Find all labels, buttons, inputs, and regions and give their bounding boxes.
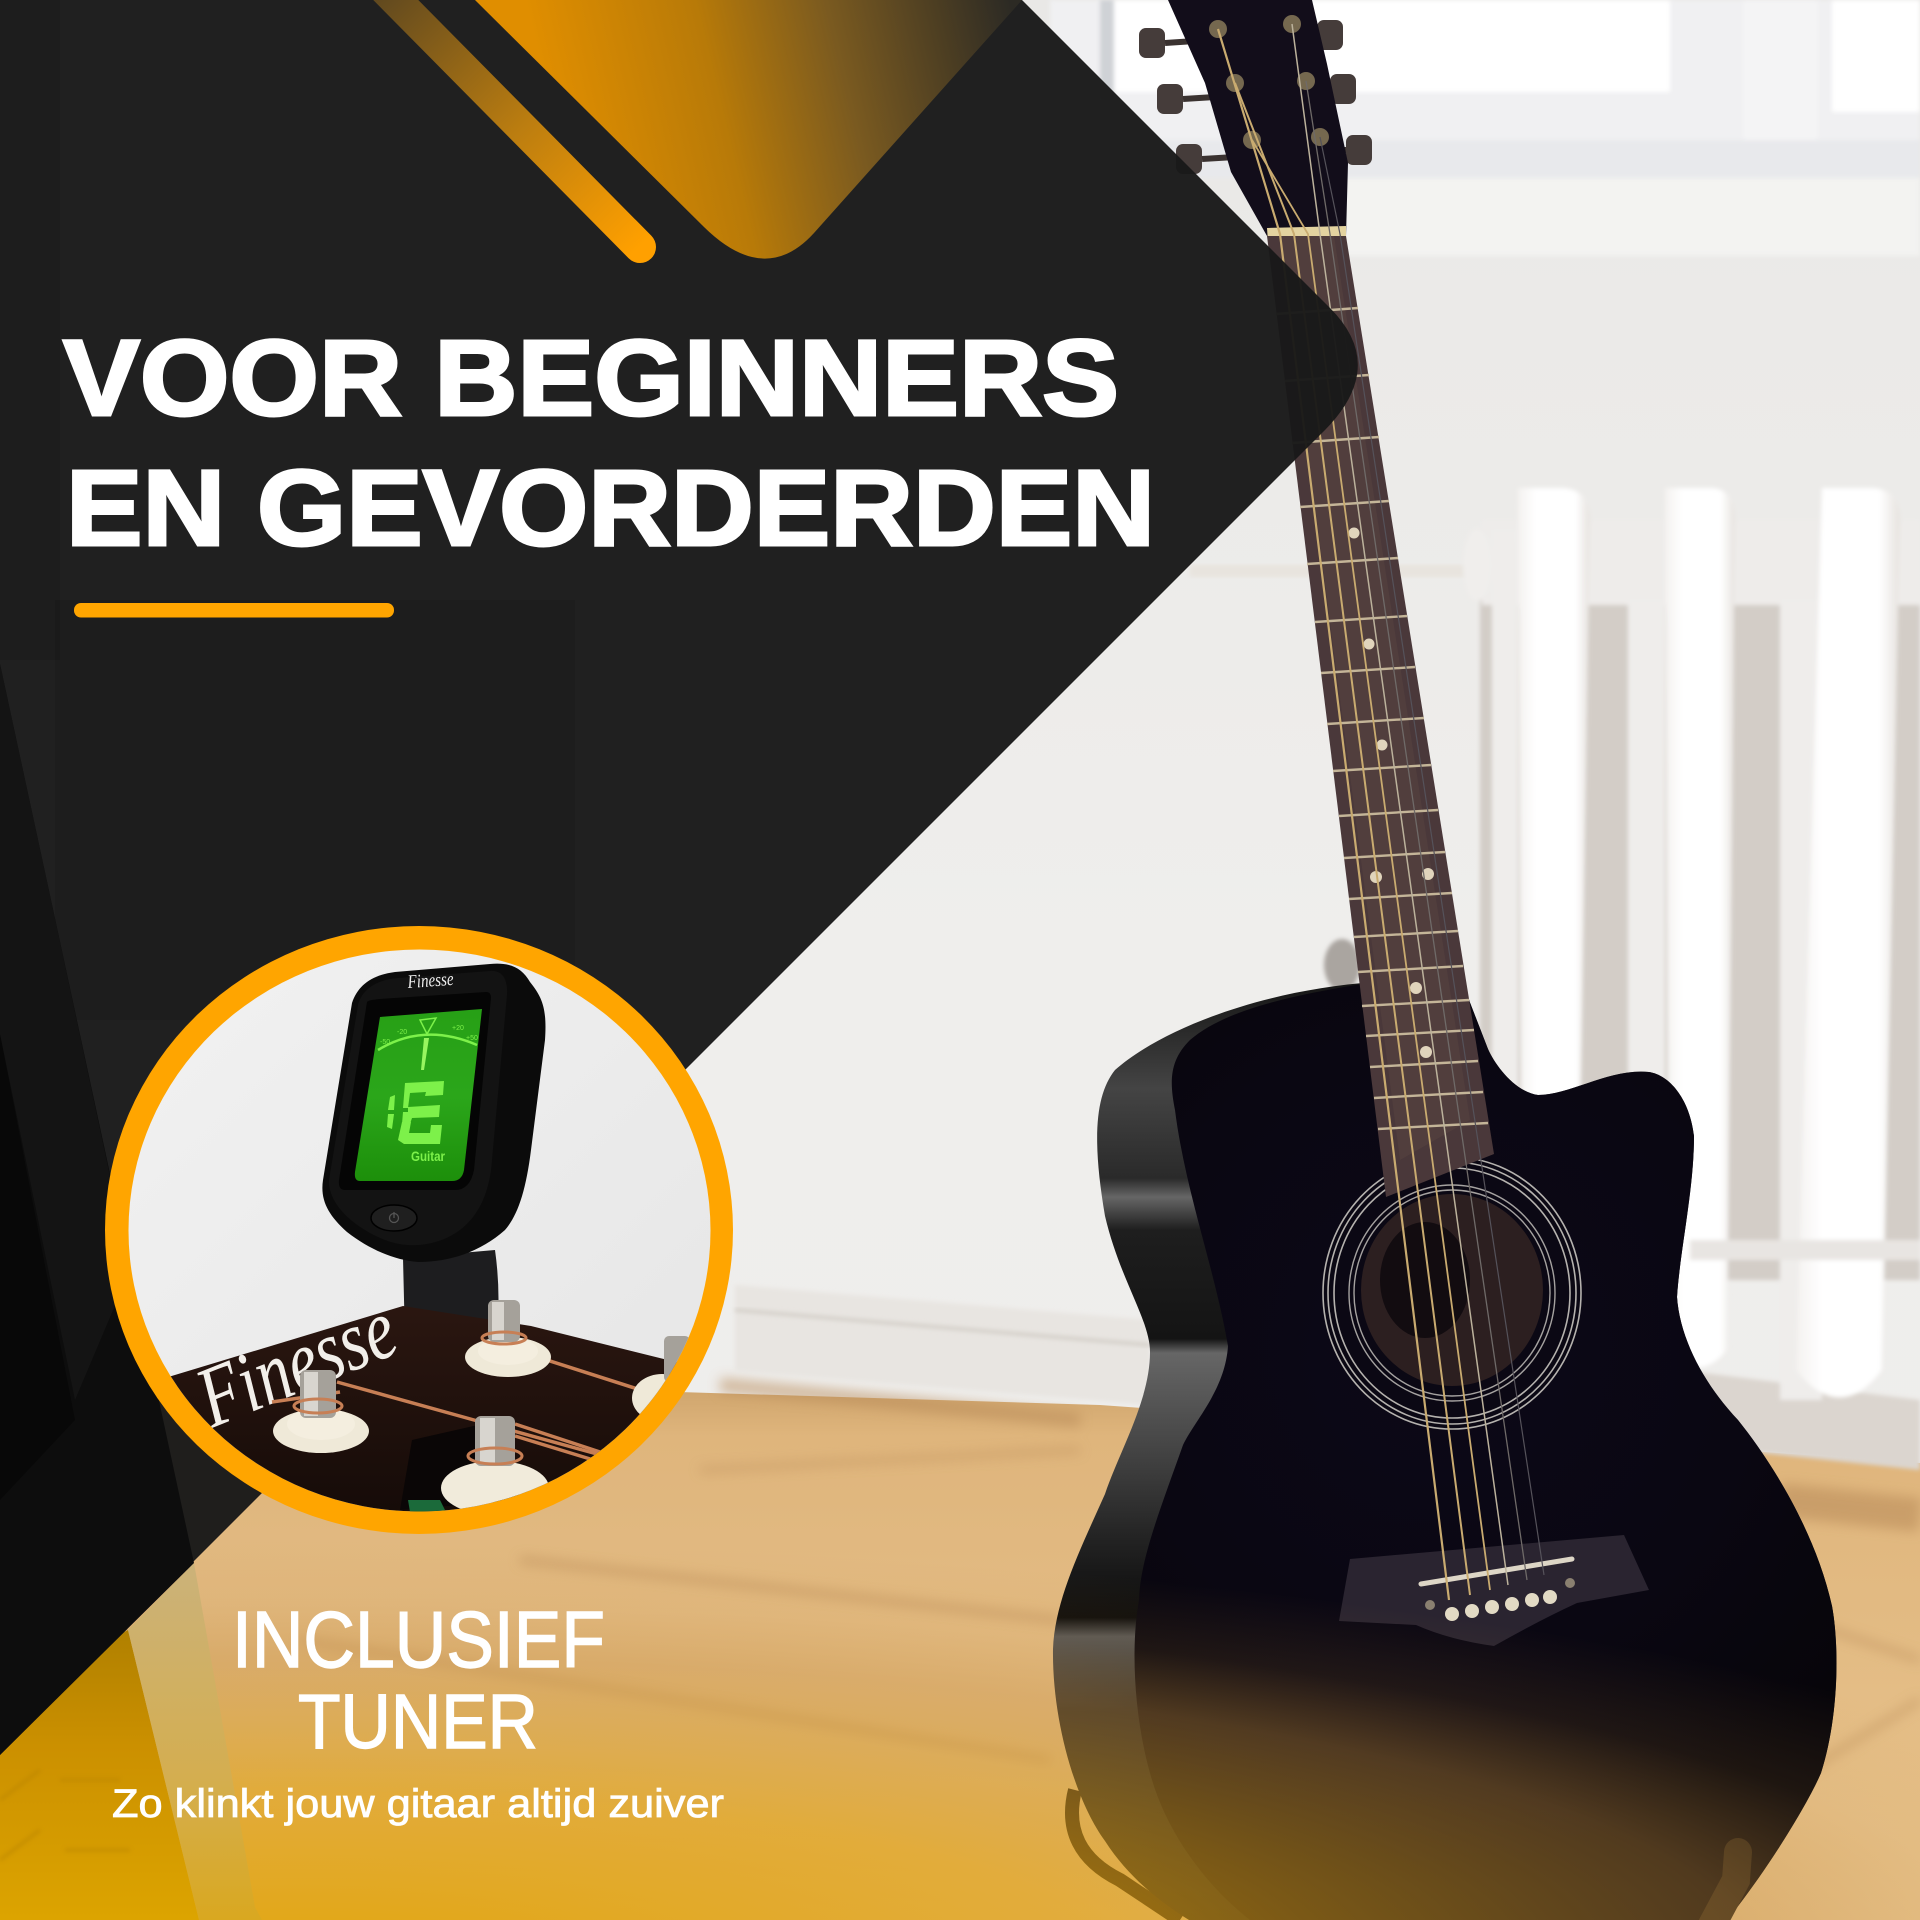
guitar stand right arm <box>1712 1852 1738 1920</box>
wall pipe <box>1190 565 1550 577</box>
headstock <box>170 1306 677 1512</box>
neck heel <box>1324 939 1360 991</box>
tuner brand: Finesse <box>406 969 454 993</box>
dark angled panel <box>0 0 1358 1755</box>
speaker in lower-left corner tinted by the glow <box>0 1563 262 1920</box>
baseboard <box>735 1285 1150 1405</box>
orange underline <box>74 603 394 618</box>
callout subtitle: Zo klinkt jouw gitaar altijd zuiver <box>112 1782 724 1826</box>
top orange cone shape <box>475 0 1022 259</box>
circle inset: tuner on headstock <box>100 920 740 1540</box>
callout heading line 1: INCLUSIEF <box>232 1595 605 1684</box>
clip-on tuner body <box>322 964 545 1262</box>
guitar face <box>1135 982 1837 1920</box>
speaker grille strip <box>128 1563 262 1920</box>
orange ring <box>105 926 733 1534</box>
black speaker inside panel <box>0 664 194 1755</box>
title line 2: EN GEVORDERDEN <box>66 447 1155 568</box>
speaker front panel <box>0 1630 199 1920</box>
tuner scale labels <box>380 1025 478 1046</box>
tuner screen bezel <box>339 992 491 1190</box>
brand script on headstock: Finesse <box>182 1280 409 1446</box>
bridge <box>1339 1535 1649 1646</box>
tuner clamp <box>403 1250 498 1320</box>
tuner arc scale <box>378 1035 477 1050</box>
radiator <box>1463 488 1920 1400</box>
tuner scale labels: -50 <box>380 1039 390 1046</box>
top orange diagonal stripe <box>376 0 640 247</box>
tuner power button <box>371 1205 417 1231</box>
tuner needle <box>421 1038 429 1070</box>
floor <box>0 1371 1920 1920</box>
title <box>63 317 1155 568</box>
tuner callout text <box>112 1595 724 1826</box>
headstock with tuning machines <box>1139 0 1372 242</box>
guitar <box>1053 0 1837 1920</box>
green LCD screen <box>355 1009 482 1181</box>
callout heading line 2: TUNER <box>298 1679 538 1765</box>
subtle door panel in the dark photo <box>55 600 575 1020</box>
fretboard <box>1267 236 1494 1197</box>
tuning pegs <box>273 1300 692 1515</box>
sound hole and rosette <box>1323 1157 1581 1429</box>
note letter E segments <box>387 1081 444 1144</box>
tuner scale labels: -20 <box>397 1029 407 1036</box>
tuner mode label: Guitar <box>411 1149 446 1164</box>
inset background <box>128 950 710 1512</box>
tuner scale labels: +50 <box>466 1035 478 1042</box>
window frame and panes <box>1050 0 1920 256</box>
tuner scale labels: +20 <box>452 1025 464 1032</box>
title line 1: VOOR BEGINNERS <box>63 317 1119 438</box>
guitar stand left arm <box>1072 1790 1180 1920</box>
copper strings <box>272 1359 636 1460</box>
strings <box>1218 24 1544 1600</box>
bottom golden glow overlay <box>0 1480 1920 1920</box>
guitar body side <box>1053 982 1837 1920</box>
